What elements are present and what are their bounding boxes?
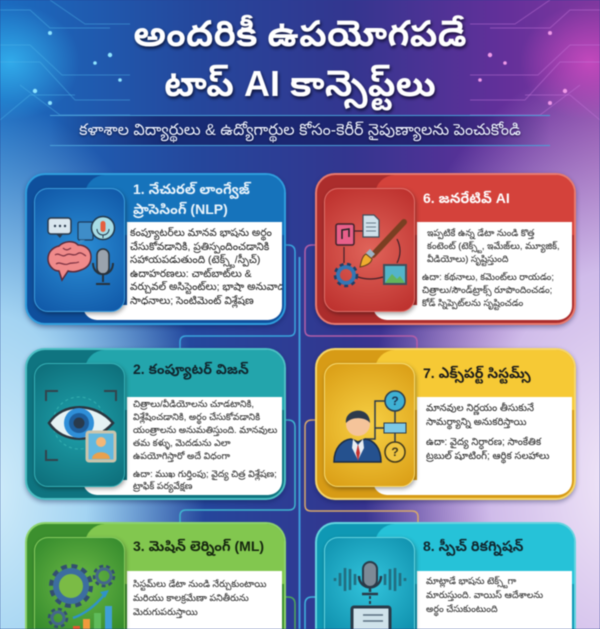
- icon: businessman with decision flowchart: ?: [391, 445, 399, 459]
- panel: 6 Generative AI: ఇప్పటికే ఉన్న డేటా నుండి కొత్త: [427, 228, 535, 238]
- icon: paintbrush with music, document, gear and image: [333, 214, 408, 288]
- panel: 6 Generative AI: కోడ్ స్నిప్పెట్‌లను సృష్టించడం: [422, 298, 523, 308]
- panel: 6 Generative AI: చిత్రాలు/సౌండ్‌ట్రాక్స్ రూపొందించడం;: [422, 285, 552, 295]
- heading: 1 NLP: ప్రాసెసింగ్ (NLP): [133, 201, 228, 217]
- panel: 8 Speech Recognition: అర్థం చేసుకుంటుంది: [426, 604, 498, 614]
- icon: businessman with decision flowchart: [332, 390, 408, 464]
- panel: 1 NLP: వర్చువల్ అసిస్టెంట్‌లు; భాషా అనువాద: [130, 281, 282, 293]
- panel: 3 Machine Learning: మరియు కాలక్రమేణా పనితీరును: [133, 592, 249, 603]
- panel: 2 Computer Vision: ట్రాఫిక్ పర్యవేక్షణ: [133, 481, 192, 491]
- panel: 8 Speech Recognition: మారుస్తుంది. వాయిస్ ఆదేశాలను: [426, 590, 543, 600]
- heading: 2 Computer Vision: 2. కంప్యూటర్ విజన్: [133, 361, 249, 377]
- heading: 6 Generative AI: 6. జనరేటివ్ AI: [423, 190, 510, 206]
- panel: 2 Computer Vision: విశ్లేషించడానికి, అర్థం చేసుకోవడానికి: [133, 412, 260, 422]
- title: అందరికీ ఉపయోగపడే: [133, 13, 467, 54]
- panel: 1 NLP: సాధనాలు; సెంటిమెంట్ విశ్లేషణ: [130, 295, 254, 307]
- title: టాప్ AI కాన్సెప్ట్‌లు: [164, 63, 436, 104]
- icon: brain with speech bubbles and microphone: [46, 215, 116, 286]
- heading: 1 NLP: 1. నేచురల్ లాంగ్వేజ్: [133, 181, 250, 197]
- panel: 3 Machine Learning: సిస్టమ్‌లు డేటా నుండి నేర్చుకుంటాయి: [133, 578, 266, 589]
- panel: 3 Machine Learning: మెరుగుపరుస్తాయి: [133, 606, 198, 617]
- panel: 2 Computer Vision: తమ కళ్ళు, మెదడును ఎలా: [133, 438, 230, 448]
- panel: 2 Computer Vision: ఉదా: ముఖ గుర్తింపు; వైద్య చిత్ర విశ్లేషణ;: [133, 469, 277, 479]
- subtitle band: [50, 115, 550, 146]
- panel: 7 Expert Systems: ట్రబుల్ షూటింగ్; ఆర్థిక సలహాలు: [426, 451, 549, 462]
- heading: 1 NLP: [132, 181, 252, 219]
- panel: 6 Generative AI: కంటెంట్ (టెక్స్ట్, ఇమేజ్‌లు, మ్యూజిక్,: [427, 241, 560, 251]
- panel: 1 NLP: కంప్యూటర్‌లు మానవ భాషను అర్థం: [130, 227, 272, 239]
- circuit pattern decoration: [0, 0, 600, 120]
- panel: 2 Computer Vision: యంత్రాలను అనుమతిస్తుంది. మానవులు: [133, 425, 277, 435]
- panel: 1 NLP: చేసుకోవడానికి, ప్రతిస్పందించడానికి: [130, 241, 269, 253]
- heading: 8 Speech Recognition: 8. స్పీచ్ రికగ్నిషన్: [423, 538, 523, 554]
- panel: 1 NLP: ఉదాహరణలు: చాట్‌బాట్‌లు &: [130, 268, 252, 280]
- panel: 7 Expert Systems: మానవుల నిర్ణయం తీసుకునే: [426, 403, 534, 414]
- icon: gears and growth chart: [47, 564, 116, 629]
- panel: 3 Machine Learning: [25, 522, 286, 629]
- panel: 2 Computer Vision: [25, 348, 286, 500]
- heading: 3 Machine Learning: 3. మెషిన్ లెర్నింగ్ (ML): [133, 538, 264, 554]
- subtitle band: కళాశాల విద్యార్థులు & ఉద్యోగార్థుల కోసం-కెరీర్ నైపుణ్యాలను పెంచుకోండి: [79, 122, 521, 139]
- icon: eye scan with portrait: [44, 390, 118, 464]
- panel: 6 Generative AI: [315, 173, 576, 325]
- panel: 7 Expert Systems: ఉదా: వైద్య నిర్ధారణ; సాంకేతిక: [426, 437, 541, 448]
- icon: businessman with decision flowchart: ?: [391, 394, 399, 408]
- panel: 6 Generative AI: వీడియోలు) సృష్టిస్తుంది: [427, 254, 508, 264]
- panel: 1 NLP: సహాయపడుతుంది (టెక్స్ట్/స్పీచ్): [130, 254, 260, 266]
- panel: 8 Speech Recognition: మాట్లాడే భాషను టెక్స్ట్‌గా: [426, 576, 516, 586]
- title: [133, 13, 469, 114]
- panel: 7 Expert Systems: సామర్థ్యాన్ని అనుకరిస్తాయి: [426, 417, 527, 428]
- panel: 7 Expert Systems: [315, 348, 576, 500]
- panel: 2 Computer Vision: చిత్రాలు/వీడియోలను చూడటానికి,: [133, 399, 254, 409]
- heading: 7 Expert Systems: 7. ఎక్స్‌పర్ట్ సిస్టమ్స్: [423, 365, 531, 381]
- panel: 6 Generative AI: ఉదా: కథనాలు, కమెంట్‌లు రాయడం;: [422, 272, 554, 282]
- panel: 1 NLP: [25, 173, 286, 325]
- icon: microphone with sound waves and laptop: [333, 560, 407, 629]
- panel: 2 Computer Vision: ఉపయోగిస్తారో అదే విధంగా: [133, 451, 230, 461]
- panel: 8 Speech Recognition: [315, 522, 576, 629]
